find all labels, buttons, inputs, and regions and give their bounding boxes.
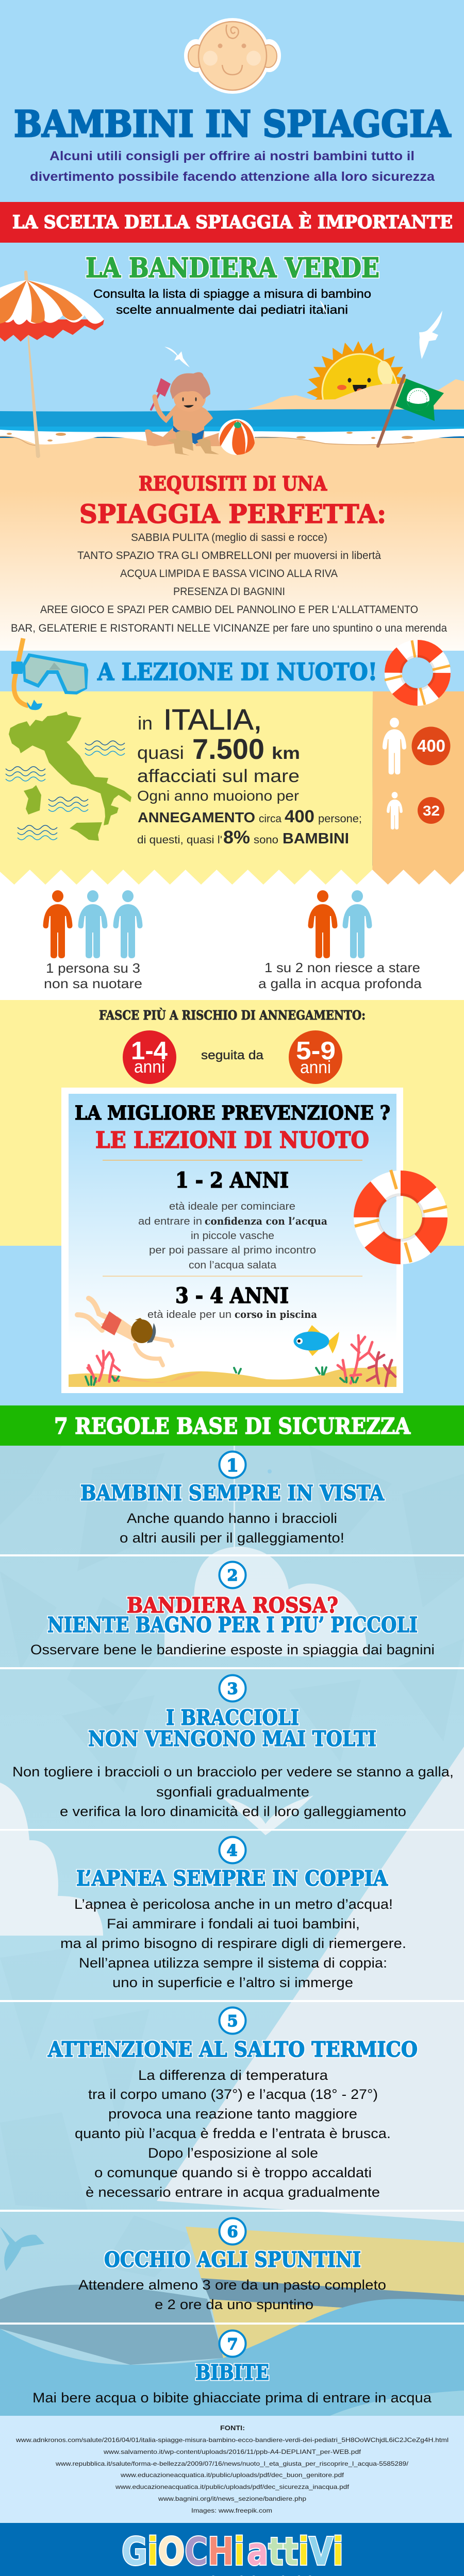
boat hull	[186, 2227, 464, 2358]
banner: la scelta della spiaggia	[0, 202, 464, 243]
icon: sun	[307, 341, 410, 429]
panel: fonti: Images: www.freepik.com	[191, 2507, 272, 2514]
icon: three people	[43, 890, 142, 958]
text: 1-2 anni description: ad entrare in	[138, 1216, 202, 1227]
rule 7: 7	[227, 2335, 238, 2353]
icon: fish	[294, 1325, 339, 1356]
rule 7	[32, 2331, 432, 2405]
rule 4: Nell’apnea utilizza sempre il sistema di coppia:	[79, 1955, 387, 1971]
list: requisiti	[11, 532, 447, 634]
boat sail	[157, 1747, 464, 2222]
rule 3: e verifica la loro dinamicità ed il loro galleggiamento	[60, 1804, 406, 1819]
badge: 5-9 anni: anni	[300, 1058, 331, 1077]
panel: fonti: www.educazioneacquatica.it/public/uploads/pdf/dec_sicurezza_inacqua.pdf	[115, 2483, 350, 2490]
sand dune	[247, 379, 464, 410]
rule 2: 2	[227, 1567, 238, 1585]
text: statistiche italia: persone;	[318, 813, 362, 825]
icon: snorkel mask	[11, 638, 88, 710]
icon: beach ball	[219, 419, 255, 455]
text: statistiche italia: Ogni anno muoiono per	[137, 788, 299, 804]
heading: requisiti di una spiaggia perfetta: REQUISITI DI UNA	[139, 472, 327, 495]
badge: 1-4 anni: anni	[134, 1057, 165, 1077]
rule 2: BANDIERA ROSSA?	[127, 1593, 338, 1618]
heading: le lezioni di nuoto: LE LEZIONI DI NUOTO	[95, 1127, 369, 1154]
subtitle	[30, 149, 435, 184]
text: consulta la lista	[93, 287, 371, 316]
cloud: centre	[164, 1547, 367, 1656]
heading: 3-4 anni: 3 - 4 ANNI	[175, 1283, 289, 1308]
panel: fasce a rischio	[0, 1000, 464, 1246]
panel: fonti: www.repubblica.it/salute/forma-e-bellezza/2009/07/16/news/nuoto_l_eta_giusta_per_riscoprire_l_acqua-5585289/	[55, 2460, 409, 2467]
list: requisiti: ACQUA LIMPIDA E BASSA VICINO ALLA RIVA	[120, 568, 338, 580]
text: 1 persona su 3: non sa nuotare	[44, 976, 142, 991]
text: 1 su 2: a galla in acqua profonda	[258, 976, 422, 991]
rule 1: 1	[226, 1455, 239, 1476]
white page area behind people	[0, 866, 464, 1005]
text: statistiche italia: km	[272, 743, 300, 762]
text: 1-2 anni description: con l’acqua salata	[189, 1260, 277, 1271]
map: italia	[9, 711, 131, 841]
panel: fonti: www.educazioneacquatica.it/public/uploads/pdf/dec_buon_genitore.pdf	[120, 2471, 344, 2479]
band: a lezione di nuoto	[0, 651, 464, 691]
cloud string	[234, 1446, 235, 1549]
rule 7: BIBITE	[195, 2360, 269, 2385]
light wave corner	[330, 2391, 464, 2416]
text: 1-2 anni description: in piccole vasche	[191, 1230, 274, 1242]
rule 3: 3	[227, 1680, 238, 1698]
rule 6: e 2 ore da uno spuntino	[155, 2297, 313, 2312]
foam	[0, 429, 464, 445]
front wave	[0, 2299, 464, 2416]
list: requisiti: TANTO SPAZIO TRA GLI OMBRELLONI per muoversi in libertà	[77, 550, 381, 562]
text: 1 persona su 3	[44, 960, 142, 991]
rule 5	[47, 2007, 418, 2200]
rule 5: tra il corpo umano (37°) e l’acqua (18° - 27°)	[88, 2087, 378, 2102]
rule 6: Attendere almeno 3 ore da un pasto completo	[78, 2277, 386, 2293]
text: statistiche italia: 8%	[223, 827, 250, 848]
text: 1 su 2: 1 su 2 non riesce a stare	[264, 960, 420, 975]
rule 4: L’apnea è pericolosa anche in un metro d’acqua!	[74, 1896, 393, 1912]
sea	[0, 408, 464, 436]
sky background	[0, 0, 464, 412]
badge: 5-9 anni	[289, 1030, 342, 1084]
panel: footer	[0, 2523, 464, 2576]
banner: la scelta della spiaggia: LA SCELTA DELLA SPIAGGIA È IMPORTANTE	[12, 211, 453, 233]
badge: 5-9 anni: 5-9	[296, 1037, 336, 1065]
logo: giochi attivi: GiOCHiattiVi	[122, 2530, 343, 2574]
rule 6	[78, 2218, 386, 2312]
badge: 1-4 anni	[123, 1030, 176, 1084]
banner: 7 regole	[0, 1405, 464, 1446]
heading: fasce più a rischio: FASCE PIÙ A RISCHIO DI ANNEGAMENTO:	[99, 1008, 366, 1023]
subtitle: divertimento possibile facendo attenzione alla loro sicurezza	[30, 170, 435, 184]
text: 1-2 anni description	[138, 1201, 327, 1271]
rule 4: 4	[227, 1842, 237, 1860]
panel: sky background	[0, 1246, 464, 1405]
panel: fonti: www.salvamento.it/wp-content/uploads/2016/11/ppb-A4-DEPLIANT_per-WEB.pdf	[103, 2448, 361, 2455]
icon: baby face	[184, 18, 281, 94]
text: 1 persona su 3: 1 persona su 3	[46, 960, 140, 976]
rule 4: uno in superficie e l’altro si immerge	[112, 1975, 353, 1990]
rule 5: quanto più l’acqua è fredda e l’entrata è brusca.	[75, 2126, 391, 2141]
sea bed	[69, 1366, 396, 1387]
icon: green flag	[378, 376, 444, 446]
list: requisiti: PRESENZA DI BAGNINI	[173, 586, 285, 598]
rule 3	[12, 1675, 454, 1819]
rule 5: Dopo l’esposizione al sole	[148, 2145, 318, 2161]
text: statistiche italia: sono	[254, 834, 278, 846]
panel: fonti	[0, 2416, 464, 2523]
rule 1: o altri ausili per il galleggiamento!	[120, 1530, 344, 1546]
icon: child with shovel	[145, 372, 221, 446]
rule 7: Mai bere acqua o bibite ghiacciate prima di entrare in acqua	[32, 2390, 432, 2405]
icon: beach umbrella	[0, 270, 104, 458]
text: 3-4 anni description	[147, 1308, 317, 1320]
rule 5: ATTENZIONE AL SALTO TERMICO	[47, 2037, 418, 2062]
rule 5: provoca una reazione tanto maggiore	[108, 2106, 357, 2122]
heading: requisiti di una spiaggia perfetta	[79, 472, 386, 529]
rule 2	[30, 1562, 435, 1657]
text: statistiche italia: ITALIA,	[163, 703, 262, 736]
text: statistiche italia: 7.500	[192, 733, 264, 765]
heading: requisiti di una spiaggia perfetta: SPIAGGIA PERFETTA:	[79, 499, 386, 529]
rule 5: La differenza di temperatura	[138, 2067, 328, 2083]
rule 1: Anche quando hanno i braccioli	[127, 1511, 337, 1526]
icon: two people	[308, 890, 372, 958]
rule 3: sgonfiali gradualmente	[156, 1784, 309, 1800]
rule 3: NON VENGONO MAI TOLTI	[88, 1726, 376, 1751]
icon: seagulls	[164, 300, 442, 367]
text: statistiche italia: affacciati sul mare	[137, 766, 300, 786]
heading: 1-2 anni: 1 - 2 ANNI	[175, 1168, 289, 1193]
icon: waves	[6, 741, 125, 840]
list: requisiti: SABBIA PULITA (meglio di sassi e rocce)	[131, 532, 327, 544]
icon: man with 32 badge	[387, 792, 444, 829]
icon: man with 400 badge	[383, 718, 451, 774]
banner: 7 regole: 7 REGOLE BASE DI SICUREZZA	[54, 1414, 411, 1439]
text: seguita da: seguita da	[201, 1048, 264, 1062]
panel: regole background	[0, 1446, 464, 2416]
rule 3: I BRACCIOLI	[166, 1705, 299, 1730]
icon: life ring large	[355, 1170, 447, 1262]
badge: 1-4 anni: 1-4	[131, 1037, 168, 1065]
subtitle: Alcuni utili consigli per offrire ai nostri bambini tutto il	[49, 149, 415, 163]
rule 6: 6	[227, 2223, 238, 2241]
rule 4: L’APNEA SEMPRE IN COPPIA	[76, 1866, 388, 1891]
icon: life ring	[385, 640, 450, 705]
rule 4: ma al primo bisogno di respirare digli di riemergere.	[60, 1936, 406, 1951]
text: statistiche italia: in	[138, 713, 153, 734]
icon: corals	[86, 1335, 395, 1386]
panel: fonti: FONTI:	[220, 2425, 245, 2432]
text: statistiche italia: di questi, quasi l'	[137, 834, 222, 846]
decorative fish tail	[0, 2227, 44, 2271]
rule 5: 5	[227, 2012, 238, 2030]
rule 1: BAMBINI SEMPRE IN VISTA	[80, 1481, 385, 1505]
icon: bird shape	[222, 1795, 313, 1835]
rule 3: Non togliere i braccioli o un bracciolo per vedere se stanno a galla,	[12, 1764, 454, 1780]
icon: sand castle	[168, 430, 219, 455]
panel: dati annegamento	[0, 691, 464, 885]
text: consulta la lista: scelte annualmente dai pediatri italiani	[116, 303, 348, 316]
cloud: left	[0, 1783, 103, 1936]
text: statistiche italia: circa	[259, 813, 281, 825]
heading: la bandiera verde: LA BANDIERA VERDE	[86, 252, 379, 284]
rule 4: Fai ammirare i fondali ai tuoi bambini,	[107, 1916, 360, 1931]
text: statistiche italia: BAMBINI	[283, 831, 349, 847]
rule 5: è necessario entrare in acqua gradualmente	[86, 2184, 380, 2200]
text: 1-2 anni description: età ideale per cominciare	[169, 1201, 295, 1212]
text: statistiche italia: ANNEGAMENTO	[138, 809, 255, 825]
text: 3-4 anni description: età ideale per un	[147, 1309, 231, 1320]
panel: fonti: www.adnkronos.com/salute/2016/04/01/italia-spiagge-misura-bambino-ecco-bandiere-verdi-dei-pediatri_5H8OoWChjdL6iC2JCeZg4H.html	[15, 2436, 449, 2444]
sand background	[0, 438, 464, 651]
icon: man with 400 badge: 400	[417, 736, 445, 755]
text: 1-2 anni description: per poi passare al primo incontro	[149, 1245, 316, 1256]
panel: lezioni di nuoto card	[61, 1088, 403, 1393]
rule 1	[80, 1452, 385, 1546]
heading: la migliore prevenzione: LA MIGLIORE PREVENZIONE ?	[75, 1101, 390, 1124]
list: requisiti: AREE GIOCO E SPAZI PER CAMBIO DEL PANNOLINO E PER L'ALLATTAMENTO	[40, 604, 418, 616]
dark wave	[0, 2285, 223, 2365]
icon: swimming child	[77, 1298, 172, 1365]
list: requisiti: BAR, GELATERIE E RISTORANTI NELLE VICINANZE per fare uno spuntino o una merenda	[11, 622, 447, 634]
panel: fonti: www.bagnini.org/it/news_sezione/bandiere.php	[158, 2495, 306, 2502]
heading: a lezione di nuoto: A LEZIONE DI NUOTO!	[97, 658, 377, 686]
rule 2: Osservare bene le bandierine esposte in spiaggia dai bagnini	[30, 1642, 435, 1657]
rule 5: o comunque quando si è troppo accaldati	[94, 2165, 372, 2180]
text: statistiche italia	[137, 703, 362, 848]
rule 4	[60, 1837, 406, 1990]
text: statistiche italia: quasi	[137, 743, 184, 763]
text: consulta la lista: Consulta la lista di spiagge a misura di bambino	[93, 287, 371, 300]
icon: man with 32 badge: 32	[423, 803, 440, 819]
text: 3-4 anni description: corso in piscina	[235, 1308, 317, 1320]
text: 1 su 2	[258, 960, 422, 991]
rule 6: OCCHIO AGLI SPUNTINI	[104, 2247, 361, 2272]
text: 1-2 anni description: confidenza con l’acqua	[205, 1215, 327, 1227]
text: statistiche italia: 400	[285, 807, 314, 826]
